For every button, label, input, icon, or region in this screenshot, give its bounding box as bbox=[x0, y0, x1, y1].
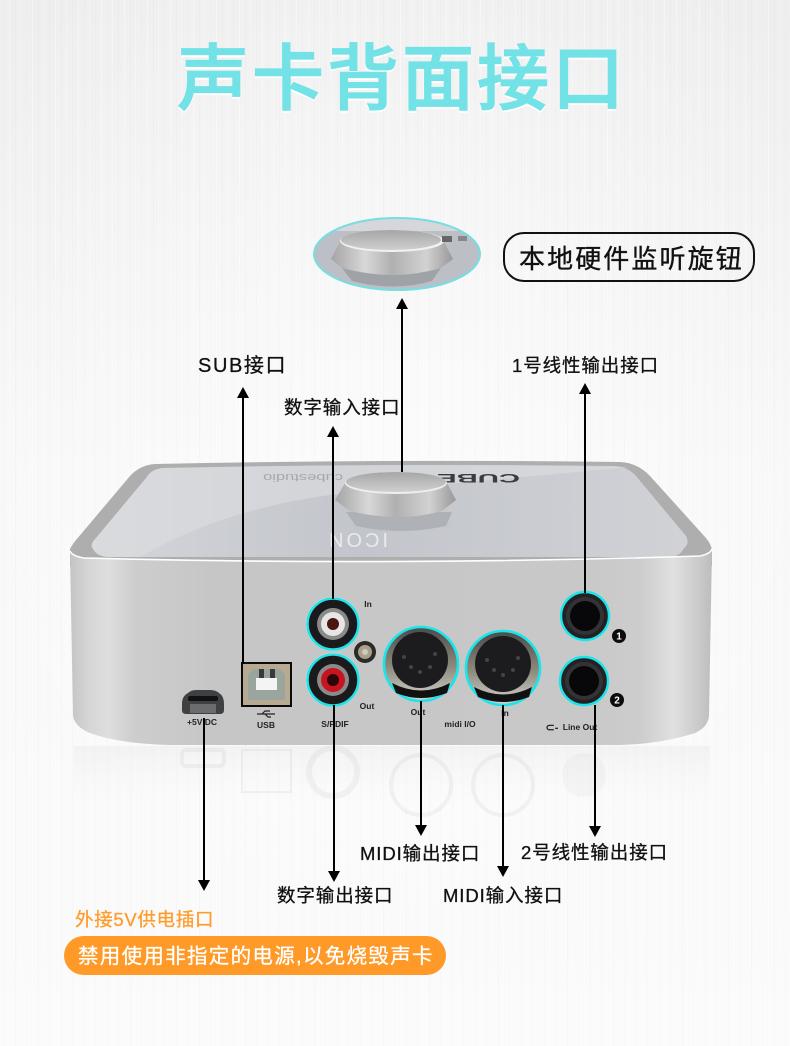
local monitor knob label bbox=[504, 233, 754, 281]
line out jack 1 bbox=[561, 592, 626, 643]
arrow: 5V power bbox=[198, 718, 210, 891]
local monitor knob label: 本地硬件监听旋钮 bbox=[519, 244, 744, 274]
line out jack 2: Line Out bbox=[563, 722, 597, 732]
device glass top panel: cubestudio bbox=[263, 471, 343, 483]
MIDI in port bbox=[466, 631, 540, 718]
device top shell bbox=[70, 461, 712, 566]
MIDI out port bbox=[384, 627, 476, 729]
label: MIDI output: MIDI输出接口 bbox=[360, 843, 480, 864]
ground screw bbox=[354, 641, 376, 663]
reflection below device bbox=[74, 746, 710, 815]
arrow: line out 2 bbox=[589, 705, 601, 837]
label: MIDI input: MIDI输入接口 bbox=[443, 885, 563, 906]
arrow: SUB port bbox=[237, 387, 249, 664]
MIDI out port: midi I/O bbox=[444, 719, 476, 729]
S/PDIF in RCA port bbox=[306, 597, 372, 651]
line out jack 2: ⊂- bbox=[546, 722, 559, 734]
label: digital output: 数字输出接口 bbox=[277, 885, 393, 906]
label: digital input: 数字输入接口 bbox=[284, 397, 400, 418]
device glass top panel: CUBE bbox=[437, 471, 520, 485]
MIDI in port: In bbox=[501, 708, 509, 718]
device front face bbox=[70, 549, 712, 745]
USB-B port: USB bbox=[257, 720, 275, 730]
line out jack 2 bbox=[546, 657, 624, 734]
label: SUB port: SUB接口 bbox=[198, 354, 287, 377]
label: 5V power: 外接5V供电插口 bbox=[75, 909, 214, 930]
audio interface device bbox=[70, 461, 712, 745]
arrow: MIDI output bbox=[415, 701, 427, 836]
arrow: knob bbox=[396, 298, 408, 472]
knob close-up badge bbox=[314, 218, 480, 290]
MIDI out port: Out bbox=[411, 707, 425, 717]
line out jack 2: 2 bbox=[614, 696, 620, 706]
arrow: digital input bbox=[327, 426, 339, 599]
title: 声卡背面接口 bbox=[177, 40, 627, 120]
warning pill: 禁用使用非指定的电源,以免烧毁声卡 bbox=[78, 945, 434, 968]
micro USB port: +5V DC bbox=[187, 717, 217, 727]
S/PDIF in RCA port: In bbox=[364, 599, 372, 609]
S/PDIF out RCA port: S/PDIF bbox=[321, 719, 349, 729]
label: line out 2: 2号线性输出接口 bbox=[521, 842, 668, 863]
USB-B port bbox=[242, 663, 291, 730]
device glass top panel: ICON bbox=[326, 528, 388, 550]
volume knob bbox=[335, 472, 456, 531]
device glass top panel bbox=[92, 465, 688, 557]
arrow: digital output bbox=[328, 705, 340, 882]
arrow: MIDI input bbox=[497, 705, 509, 877]
S/PDIF out RCA port: Out bbox=[360, 701, 374, 711]
line out jack 1: 1 bbox=[616, 632, 622, 642]
micro USB port bbox=[182, 690, 224, 727]
label: line out 1: 1号线性输出接口 bbox=[512, 355, 659, 376]
warning pill bbox=[64, 936, 446, 975]
arrow: line out 1 bbox=[579, 383, 591, 593]
S/PDIF out RCA port bbox=[306, 653, 374, 729]
